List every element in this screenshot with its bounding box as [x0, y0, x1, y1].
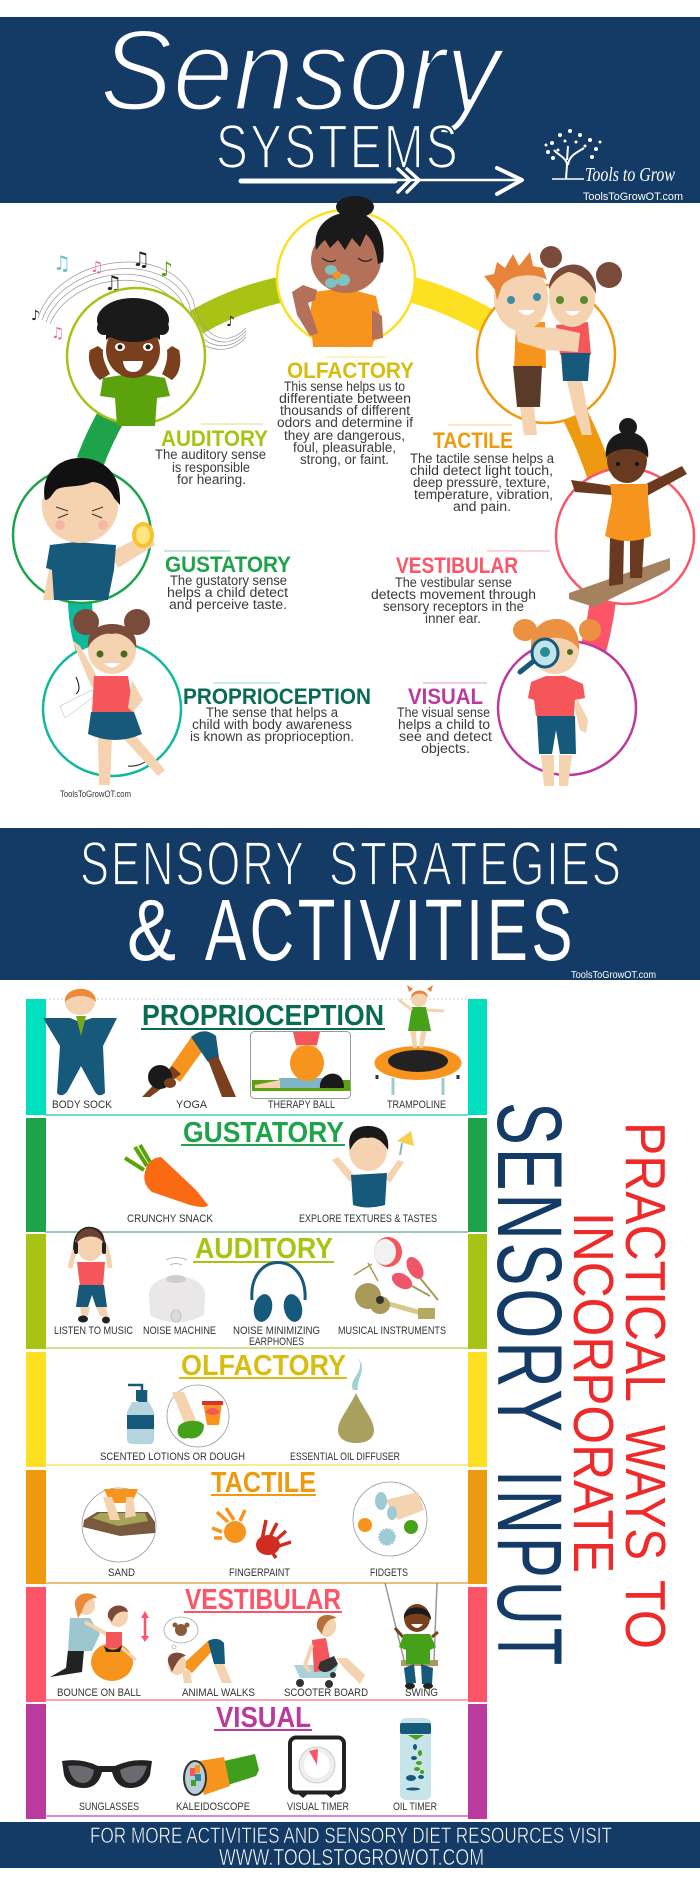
icon: earphones [251, 1262, 305, 1324]
logo: Tools to Grow tree [544, 129, 683, 203]
panel: olfactory child [277, 196, 415, 347]
icon: animal walks [164, 1617, 232, 1683]
icon: bounce on ball [50, 1593, 149, 1681]
text block: auditory: for hearing. [177, 472, 246, 487]
logo: Tools to Grow tree: ToolsToGrowOT.com [583, 191, 683, 203]
icon: visual timer [290, 1738, 344, 1798]
panel: proprioception child [43, 609, 181, 785]
icon: musical instruments [354, 1237, 438, 1319]
panel: vestibular activities: SWING [405, 1687, 438, 1699]
panel: proprioception activities: THERAPY BALL [268, 1099, 335, 1111]
text block: olfactory: This sense helps us to [284, 379, 405, 394]
heading: sensory strategies [80, 830, 623, 899]
labels: SAND [108, 1567, 135, 1579]
text block: visual: objects. [421, 741, 470, 756]
panel: olfactory activities: ESSENTIAL OIL DIFFUSER [290, 1451, 400, 1463]
heading: OLFACTORY [181, 1350, 346, 1382]
heading: activities [127, 882, 576, 979]
heading: VISUAL [216, 1702, 311, 1734]
icon: sunglasses [62, 1760, 152, 1788]
music staff and notes: ♫ [53, 251, 71, 275]
heading: activities: & [127, 882, 176, 979]
panel: auditory activities: EARPHONES [249, 1336, 304, 1348]
text block: visual: helps a child to [398, 717, 490, 732]
title: Sensory: Sensory [100, 7, 506, 135]
icon: yoga [142, 1031, 236, 1097]
icon: noise machine [149, 1258, 205, 1322]
panel: gustatory child [13, 458, 155, 603]
panel: tactile activities: FIDGETS [370, 1567, 408, 1579]
text block: auditory: AUDITORY [161, 426, 268, 451]
panel: auditory activities: MUSICAL INSTRUMENTS [338, 1325, 446, 1337]
panel: proprioception activities: YOGA [176, 1099, 208, 1111]
text block: tactile [410, 425, 554, 514]
heading: GUSTATORY [183, 1117, 344, 1149]
vertical title: sensory input: INPUT [478, 1470, 580, 1668]
panel: visual activities: KALEIDOSCOPE [176, 1801, 250, 1813]
heading: TACTILE [211, 1467, 316, 1499]
title: Systems: SYSTEMS [216, 113, 460, 182]
footer band: WWW.TOOLSTOGROWOT.COM [219, 1844, 484, 1870]
watermark: ToolsToGrowOT.com [571, 970, 656, 981]
text block: gustatory: GUSTATORY [165, 552, 291, 577]
icon: sand tray [82, 1488, 156, 1562]
vertical title: sensory input: SENSORY [478, 1102, 580, 1435]
icon: swing [385, 1583, 438, 1689]
panel: auditory activities: NOISE MACHINE [143, 1325, 216, 1337]
text block: visual: see and detect [399, 729, 492, 744]
header band: Sensory Systems [0, 7, 700, 203]
text block: vestibular [371, 551, 550, 626]
text block: auditory: is responsible [172, 460, 250, 475]
panel: proprioception activities [26, 985, 487, 1115]
labels: LISTEN TO MUSIC [54, 1325, 133, 1337]
panel: auditory activities: NOISE MINIMIZING [233, 1325, 320, 1337]
heading: AUDITORY [195, 1233, 333, 1265]
text block: visual: VISUAL [408, 684, 483, 709]
text block: gustatory: helps a child detect [167, 585, 288, 600]
panel: vestibular child [556, 418, 694, 607]
text block: gustatory: and perceive taste. [169, 597, 287, 612]
text block: vestibular: inner ear. [425, 611, 481, 626]
arrow under title [241, 168, 522, 194]
panel: tactile children [477, 246, 622, 435]
watermark: ToolsToGrowOT.com [60, 789, 131, 799]
panel: auditory activities [26, 1227, 487, 1349]
text block: gustatory: The gustatory sense [170, 573, 287, 588]
panel: visual child [498, 619, 636, 786]
band: sensory strategies and activities [0, 828, 700, 981]
text block: proprioception: PROPRIOCEPTION [183, 684, 371, 709]
text block: auditory [155, 424, 268, 487]
icon: oil timer [400, 1718, 431, 1800]
music staff and notes: ♫ [90, 258, 103, 276]
text block: visual [397, 683, 492, 756]
music staff and notes: ♪ [31, 308, 40, 324]
panel: auditory child [67, 288, 205, 426]
text block: auditory: The auditory sense [155, 447, 266, 462]
text block: vestibular: detects movement through [371, 587, 536, 602]
heading: VESTIBULAR [185, 1584, 341, 1616]
icon: oil diffuser [338, 1358, 374, 1443]
text block: proprioception: child with body awareness [192, 717, 352, 732]
text block: proprioception: The sense that helps a [206, 705, 338, 720]
text block: proprioception: is known as proprioception. [190, 729, 354, 744]
logo: Tools to Grow tree: Tools to Grow [585, 164, 676, 186]
icon: carrot [125, 1145, 208, 1207]
icon: scooter board [294, 1615, 365, 1688]
text block: vestibular: The vestibular sense [395, 575, 512, 590]
heading: PROPRIOCEPTION [142, 1000, 384, 1032]
text block: tactile: The tactile sense helps a [410, 451, 554, 466]
panel: vestibular activities [26, 1583, 487, 1702]
music staff and notes: ♫ [132, 247, 150, 271]
text block: olfactory: strong, or faint. [300, 452, 389, 467]
panel: proprioception activities: TRAMPOLINE [387, 1099, 446, 1111]
text block: tactile: temperature, vibration, [414, 487, 553, 502]
panel: vestibular activities: SCOOTER BOARD [284, 1687, 368, 1699]
icon: kaleidoscope [184, 1754, 259, 1795]
panel: visual activities: VISUAL TIMER [287, 1801, 349, 1813]
footer band [0, 1822, 700, 1870]
labels: BODY SOCK [52, 1099, 113, 1111]
panel: olfactory activities [26, 1350, 487, 1467]
music staff and notes: ♫ [104, 271, 122, 295]
icon: child tasting [332, 1126, 414, 1208]
text block: vestibular: sensory receptors in the [383, 599, 524, 614]
panel: gustatory activities: EXPLORE TEXTURES & TASTES [299, 1213, 437, 1225]
icon: trampoline [374, 985, 462, 1095]
icon: therapy ball [250, 1032, 350, 1098]
text block: olfactory: they are dangerous, [284, 428, 405, 443]
icon: body sock [43, 989, 117, 1095]
icon: child with headphones [70, 1227, 110, 1324]
vertical title: practical ways to: PRACTICAL [613, 1122, 677, 1402]
panel: vestibular activities: ANIMAL WALKS [182, 1687, 255, 1699]
icon: fidgets [353, 1482, 427, 1556]
sensory pathway arc [80, 290, 603, 650]
text block: vestibular: VESTIBULAR [396, 553, 518, 578]
text block: tactile: and pain. [453, 499, 511, 514]
text block: olfactory: foul, pleasurable, [293, 440, 396, 455]
text block: gustatory [164, 551, 291, 612]
panel: tactile activities: FINGERPAINT [229, 1567, 290, 1579]
music staff and notes: ♪ [226, 314, 235, 330]
text block: proprioception [183, 683, 371, 744]
text block: olfactory: differentiate between [279, 391, 411, 406]
panel: visual activities [26, 1702, 487, 1819]
text block: olfactory [277, 357, 414, 467]
vertical title: practical ways to: TO [613, 1580, 677, 1649]
labels: SCENTED LOTIONS OR DOUGH [100, 1451, 245, 1463]
labels: SUNGLASSES [79, 1801, 139, 1813]
heading: sensory strategies: SENSORY [80, 830, 306, 899]
labels: BOUNCE ON BALL [57, 1687, 141, 1699]
text block: visual: The visual sense [397, 705, 490, 720]
panel: tactile activities [26, 1467, 487, 1584]
text block: olfactory: odors and determine if [277, 415, 413, 430]
text block: tactile: TACTILE [433, 428, 513, 453]
text block: tactile: child detect light touch, [410, 463, 553, 478]
labels: CRUNCHY SNACK [127, 1213, 214, 1225]
vertical title: practical ways to [613, 1122, 677, 1649]
music staff and notes [31, 247, 246, 349]
music staff and notes: ♫ [51, 324, 64, 342]
panel: visual activities: OIL TIMER [393, 1801, 437, 1813]
text block: olfactory: thousands of different [280, 403, 410, 418]
vertical title: incorporate: INCORPORATE [561, 1212, 625, 1573]
panel: gustatory activities [26, 1117, 487, 1232]
vertical title: practical ways to: WAYS [613, 1425, 677, 1560]
icon: handprints [212, 1508, 291, 1558]
text block: olfactory: OLFACTORY [287, 358, 414, 383]
icon: lotion bottle [127, 1385, 154, 1444]
icon: dough in circle [167, 1385, 229, 1447]
music staff and notes: ♪ [160, 257, 173, 281]
text block: tactile: deep pressure, texture, [413, 475, 550, 490]
